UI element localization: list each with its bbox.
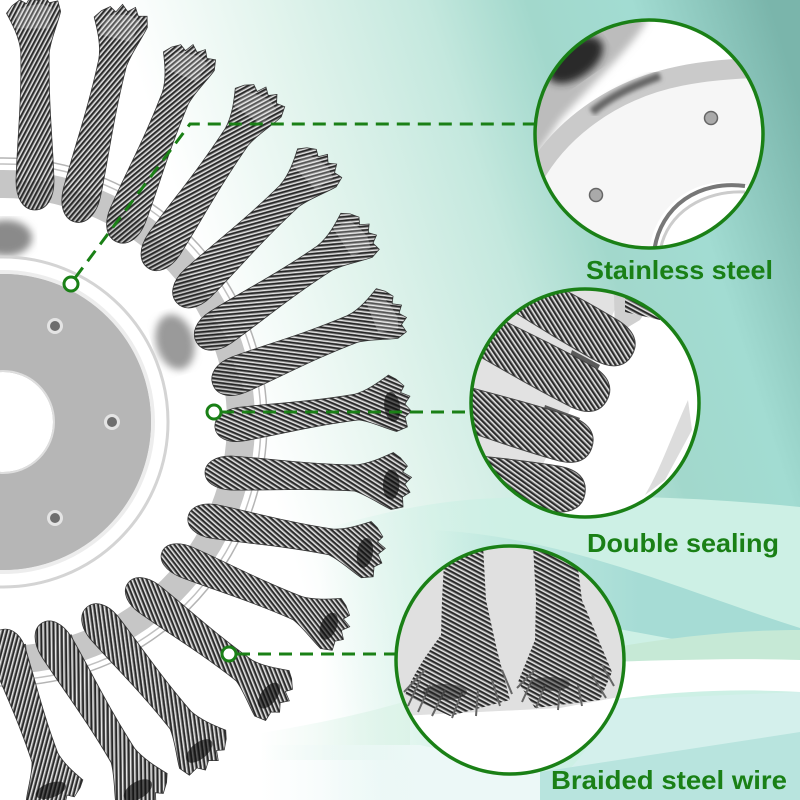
rivets — [47, 318, 120, 526]
wire wheel brush — [0, 0, 415, 800]
detail circle: double sealing — [469, 287, 701, 519]
twisted wire spokes — [0, 0, 415, 800]
label: stainless steel: Stainless steel — [586, 255, 773, 285]
centre plate — [0, 257, 168, 587]
label: double sealing: Double sealing — [587, 528, 779, 558]
callout line: stainless steel — [64, 124, 535, 291]
label: braided steel wire: Braided steel wire — [551, 765, 787, 795]
detail circle: braided steel wire — [390, 540, 630, 780]
detail circle: stainless steel — [533, 18, 765, 250]
callout line: double sealing — [207, 405, 471, 419]
hub outer ring — [0, 158, 267, 686]
callout line: braided steel wire — [222, 647, 396, 661]
